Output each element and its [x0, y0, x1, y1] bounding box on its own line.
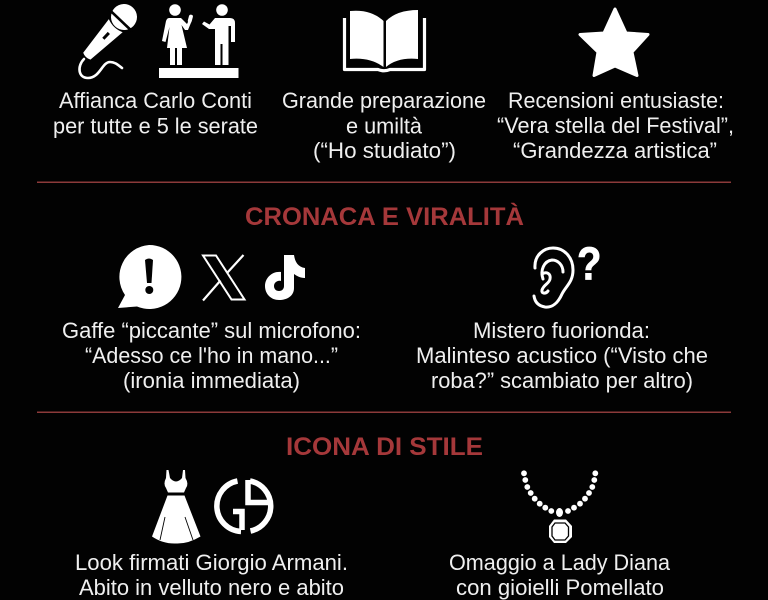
text: Armani look caption: Abito in velluto nero e abito: [79, 575, 344, 600]
icon: open book: [344, 10, 424, 71]
icon: dress: [152, 470, 200, 544]
text: Lady Diana caption: [449, 550, 671, 600]
text: off-air mystery caption: roba?” scambiato per altro): [431, 368, 693, 393]
text: preparation caption: e umiltà: [346, 114, 423, 138]
icon: X logo: [203, 255, 244, 300]
text: Lady Diana caption: Omaggio a Lady Diana: [449, 550, 671, 575]
text: Armani look caption: [75, 550, 348, 600]
text: presenter caption: Affianca Carlo Conti: [59, 88, 252, 113]
text: reviews caption: “Vera stella del Festival”,: [497, 113, 734, 138]
text: preparation caption: [282, 88, 486, 163]
text: microphone gaffe caption: [62, 318, 361, 393]
icon: TikTok logo: [265, 255, 305, 300]
text: reviews caption: [497, 88, 734, 163]
icon: Giorgio Armani logo: [217, 480, 271, 532]
text: off-air mystery caption: Malinteso acustico (“Visto che: [416, 343, 708, 368]
text: reviews caption: “Grandezza artistica”: [513, 138, 717, 163]
icon: ear with question mark: ?: [577, 238, 602, 290]
icon: microphone: [74, 0, 145, 78]
text: microphone gaffe caption: (ironia immediata): [123, 368, 300, 393]
icon: speech bubble with exclamation mark: [118, 245, 181, 309]
text: preparation caption: (“Ho studiato”): [313, 138, 456, 163]
text: Armani look caption: Look firmati Giorgio Armani.: [75, 550, 348, 575]
icon: ear with question mark: [534, 238, 602, 307]
heading: cronaca e viralità: CRONACA E VIRALITÀ: [245, 202, 524, 231]
text: presenter caption: [53, 88, 258, 138]
text: preparation caption: Grande preparazione: [282, 88, 486, 113]
icon: two presenters on stage: [159, 4, 238, 78]
heading: icona di stile: ICONA DI STILE: [286, 433, 483, 461]
text: off-air mystery caption: [416, 318, 708, 393]
text: reviews caption: Recensioni entusiaste:: [508, 88, 724, 113]
icon: star: [580, 9, 648, 76]
icon: necklace with pendant: [521, 470, 598, 543]
text: microphone gaffe caption: “Adesso ce l'ho in mano...”: [85, 343, 338, 368]
text: off-air mystery caption: Mistero fuorionda:: [473, 318, 650, 343]
text: presenter caption: per tutte e 5 le serate: [53, 114, 258, 138]
text: microphone gaffe caption: Gaffe “piccante” sul microfono:: [62, 318, 361, 343]
text: Lady Diana caption: con gioielli Pomellato: [456, 575, 664, 600]
